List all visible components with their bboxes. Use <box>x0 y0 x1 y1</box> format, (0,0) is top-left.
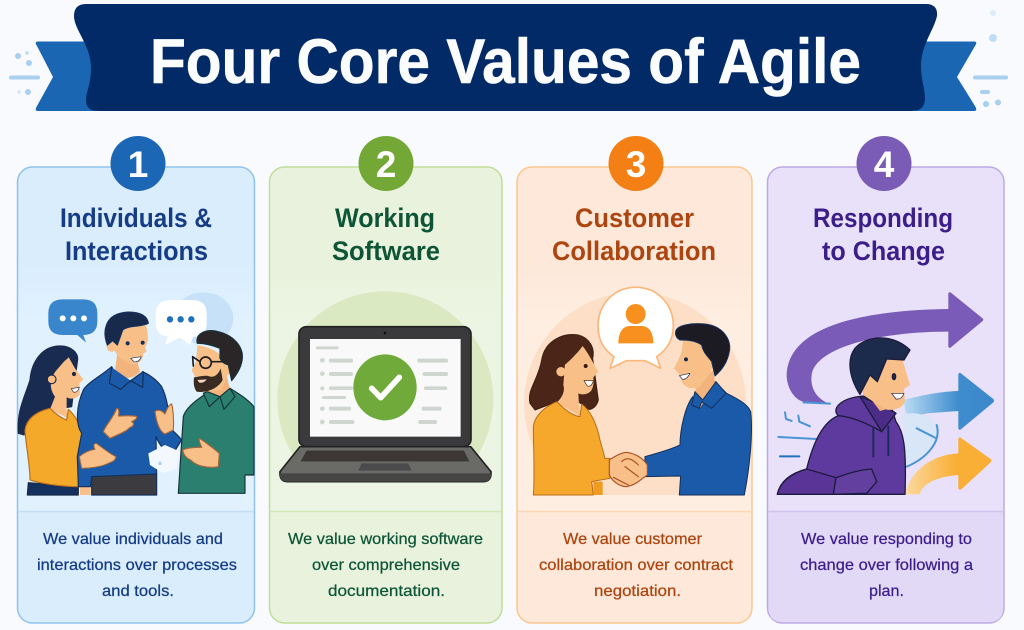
green check badge <box>353 354 417 420</box>
description: and tools. <box>102 583 174 600</box>
man in blue <box>645 324 751 495</box>
number badge: 1 <box>128 144 148 185</box>
heading: Responding <box>813 203 953 233</box>
description: documentation. <box>328 583 445 600</box>
illustration background band <box>18 262 254 511</box>
number badge <box>110 136 166 191</box>
speech bubble white <box>156 300 207 345</box>
panel 2: working software <box>270 136 502 623</box>
description: We value individuals and <box>43 531 223 548</box>
description: We value working software <box>288 531 483 548</box>
card background <box>270 167 502 623</box>
heading <box>552 203 716 266</box>
description: negotiation. <box>594 583 681 600</box>
description: We value customer <box>563 531 703 548</box>
heading: Individuals & <box>60 203 212 233</box>
blue arrow <box>903 373 994 430</box>
woman in yellow <box>18 346 108 495</box>
title banner <box>36 4 976 111</box>
description band <box>768 512 1003 622</box>
heading: Customer <box>575 203 694 233</box>
laptop base <box>280 447 491 482</box>
description: over comprehensive <box>312 557 460 574</box>
description <box>800 531 973 600</box>
man in blue <box>77 312 182 495</box>
description: change over following a <box>800 557 973 574</box>
heading: Working <box>335 203 435 233</box>
card background <box>18 167 254 623</box>
man in green <box>178 331 254 493</box>
number badge: 2 <box>376 144 396 185</box>
panel 4: responding to change <box>768 136 1004 623</box>
illustration background band <box>270 262 501 511</box>
number badge <box>856 136 912 191</box>
description: interactions over processes <box>37 557 237 574</box>
heading: to Change <box>822 236 945 266</box>
description <box>539 531 734 600</box>
number badge <box>608 136 664 191</box>
heading: Software <box>332 236 440 266</box>
orange arrow <box>905 437 991 494</box>
description: plan. <box>869 583 904 600</box>
description <box>288 531 483 600</box>
illustration background band <box>518 262 751 511</box>
number badge: 4 <box>874 144 895 185</box>
description <box>37 531 237 600</box>
laptop screen <box>299 327 471 447</box>
heading <box>60 203 212 266</box>
heading: Interactions <box>65 236 208 266</box>
heading <box>332 203 440 266</box>
decoration: right sparkles <box>973 10 1008 107</box>
heading: Collaboration <box>552 236 716 266</box>
person in purple hoodie <box>777 338 910 494</box>
panel 1: individuals and interactions <box>18 136 254 623</box>
card background <box>517 167 752 623</box>
illustration: person with change arrows <box>777 292 994 494</box>
ribbon: left tail <box>36 42 95 111</box>
purple arrow <box>787 292 983 403</box>
banner body <box>74 4 937 111</box>
motion lines <box>778 402 938 467</box>
illustration: three people talking <box>18 292 254 495</box>
description: collaboration over contract <box>539 557 734 574</box>
card background <box>768 167 1004 623</box>
pale wash behind person <box>902 413 938 467</box>
title: Four Core Values of Agile <box>150 27 861 97</box>
number badge: 3 <box>626 144 646 185</box>
handshake <box>609 452 647 487</box>
illustration: laptop with check mark <box>277 292 494 482</box>
heading <box>813 203 953 266</box>
speech bubble with person icon <box>598 287 673 368</box>
woman in yellow <box>529 335 610 495</box>
ribbon: right tail <box>915 42 976 111</box>
number badge <box>358 136 414 191</box>
panel 3: customer collaboration <box>517 136 752 623</box>
decoration: left sparkles <box>9 51 40 95</box>
speech bubble blue <box>48 299 97 343</box>
description: We value responding to <box>801 531 972 548</box>
woman's hand <box>79 443 116 468</box>
paper blob <box>148 445 180 473</box>
illustration: handshake <box>524 287 751 514</box>
